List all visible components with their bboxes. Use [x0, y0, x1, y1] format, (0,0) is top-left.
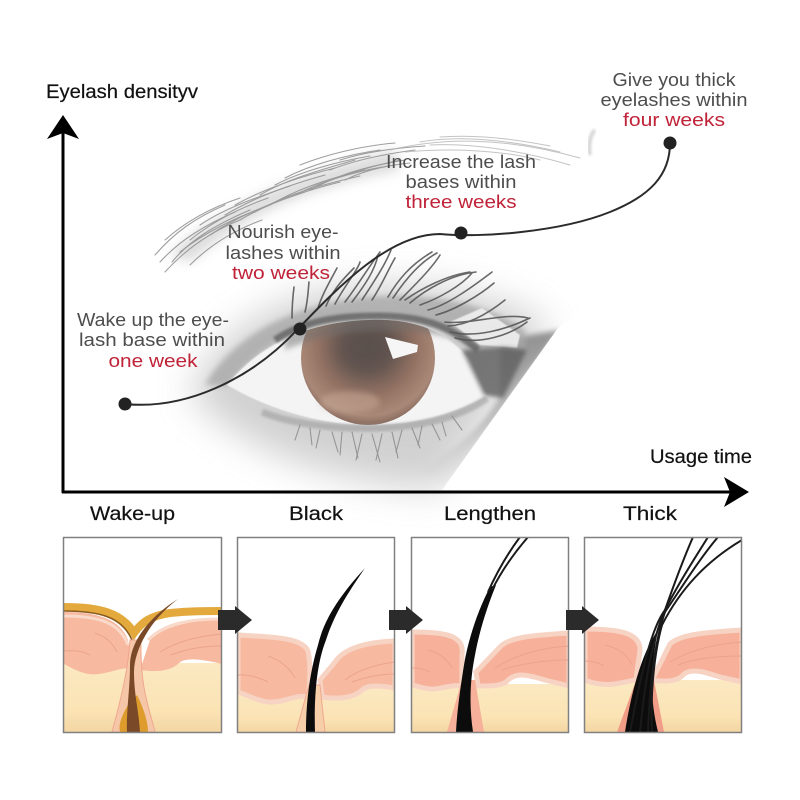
density curve	[118, 136, 676, 410]
stage label: Black: Black	[289, 504, 344, 525]
x axis with arrow	[62, 477, 749, 507]
x axis label: Usage time	[650, 447, 752, 468]
skin right	[140, 620, 222, 671]
callout: three weeks: bases within	[406, 171, 516, 192]
y axis with arrow	[47, 115, 79, 493]
skin creases	[238, 656, 395, 682]
y axis label: Eyelash densityv	[46, 82, 199, 103]
hair shaft	[127, 599, 178, 732]
callout: three weeks: Increase the lash	[386, 151, 536, 172]
skin left	[238, 635, 310, 702]
skin right	[320, 641, 395, 698]
iris highlight	[385, 337, 418, 359]
skin creases	[64, 633, 222, 655]
sebum band	[64, 607, 222, 633]
callout: one week: one week	[108, 350, 198, 371]
follicle	[112, 640, 155, 732]
callout: two weeks: two weeks	[232, 262, 330, 283]
callout: one week: lash base within	[79, 329, 225, 350]
lower lid shading	[262, 398, 487, 428]
lower lashes	[295, 416, 462, 462]
eyelid band	[205, 296, 525, 386]
brow shading	[170, 150, 400, 262]
point: week four	[664, 136, 676, 150]
follicle	[296, 685, 325, 732]
callout: one week	[77, 309, 229, 371]
follicle	[617, 680, 664, 732]
hair bundle	[625, 630, 658, 732]
stage label: Lengthen: Lengthen	[444, 504, 536, 525]
skin left	[412, 632, 462, 689]
hair	[306, 568, 365, 732]
arrow: lengthen to thick	[566, 606, 599, 634]
white eyelid highlight	[450, 308, 520, 348]
fat layer	[64, 663, 222, 732]
panel: lengthen stage	[411, 537, 569, 732]
eyeball white	[227, 320, 487, 425]
callout: two weeks: lashes within	[226, 242, 340, 263]
skin left	[585, 629, 640, 685]
hair	[456, 585, 496, 732]
eyebrow	[155, 143, 425, 272]
follicle	[447, 680, 484, 732]
arrow: black to lengthen	[389, 606, 423, 634]
arrow: wake-up to black	[218, 606, 252, 634]
face shading	[190, 285, 550, 490]
callout: one week: Wake up the eye-	[77, 309, 229, 330]
inner brow mark	[589, 130, 595, 155]
eye photograph background	[154, 128, 596, 504]
callout: two weeks: Nourish eye-	[228, 221, 338, 242]
callout: four weeks: eyelashes within	[600, 89, 748, 110]
callout: two weeks	[226, 221, 340, 283]
skin creases	[412, 646, 569, 672]
white cheek beyond the edge	[442, 255, 800, 490]
callout: four weeks: four weeks	[623, 109, 725, 130]
point: week two	[294, 322, 306, 336]
skin right	[652, 630, 742, 682]
callout: three weeks	[386, 151, 536, 212]
point: week three	[454, 226, 468, 240]
skin right	[476, 633, 569, 686]
callout: four weeks: Give you thick	[612, 69, 736, 90]
skin left	[64, 612, 132, 674]
outer dark makeup	[462, 347, 527, 398]
iris	[282, 320, 449, 425]
point: week one	[118, 398, 132, 410]
panel: black stage	[237, 537, 395, 732]
upper lashes	[292, 250, 530, 340]
upper lash line	[275, 316, 478, 350]
callout: four weeks	[600, 69, 748, 130]
skin creases	[585, 642, 742, 666]
stage label: Thick: Thick	[623, 504, 678, 525]
shading beside the cheek edge	[420, 330, 560, 487]
panel: thick stage	[584, 537, 742, 732]
stage label: Wake-up: Wake-up	[90, 504, 175, 525]
panel: wake-up stage	[63, 537, 222, 732]
eyebrow tail	[390, 136, 580, 165]
callout: three weeks: three weeks	[406, 191, 516, 212]
